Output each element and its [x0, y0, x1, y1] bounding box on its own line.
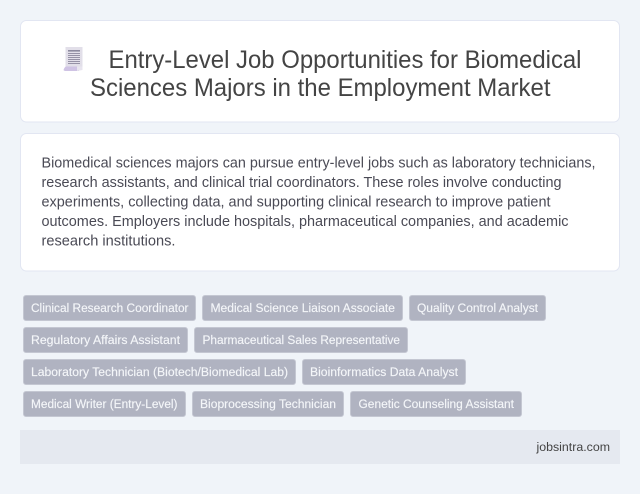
description text: research institutions. — [42, 234, 176, 250]
tag: Bioinformatics Data Analyst — [302, 360, 466, 384]
tag: Clinical Research Coordinator: Clinical Research Coordinator — [31, 301, 188, 315]
tag: Quality Control Analyst: Quality Control Analyst — [417, 301, 539, 315]
tag: Regulatory Affairs Assistant: Regulatory Affairs Assistant — [31, 333, 181, 347]
heading — [90, 46, 582, 102]
tag: Medical Science Liaison Associate: Medical Science Liaison Associate — [210, 301, 395, 315]
tag: Pharmaceutical Sales Representative — [194, 328, 408, 352]
tag: Clinical Research Coordinator — [24, 296, 196, 320]
panel: description card — [20, 134, 620, 271]
heading: Sciences Majors in the Employment Market — [90, 74, 551, 102]
tag: Laboratory Technician — [24, 360, 296, 384]
tag: Laboratory Technician: Laboratory Technician (Biotech/Biomedical Lab) — [31, 365, 288, 379]
tag: Medical Writer — [24, 392, 186, 416]
footer source text: jobsintra.com — [535, 440, 610, 454]
tag: Genetic Counseling Assistant: Genetic Counseling Assistant — [358, 397, 515, 411]
description text — [42, 156, 596, 250]
tag: Medical Science Liaison Associate — [202, 296, 402, 320]
panel: title card — [20, 20, 620, 122]
description text: Biomedical sciences majors can pursue entry-level jobs such as laboratory technicians, — [42, 156, 596, 172]
tag: Pharmaceutical Sales Representative: Pharmaceutical Sales Representative — [202, 333, 400, 347]
job tags — [24, 296, 546, 416]
description text: experiments, collecting data, and supporting clinical research to improve patient — [42, 194, 550, 210]
description text: outcomes. Employers include hospitals, pharmaceutical companies, and academic — [42, 214, 568, 230]
tag: Bioprocessing Technician — [192, 392, 344, 416]
description text: research assistants, and clinical trial coordinators. These roles involve conducting — [42, 175, 562, 191]
tag: Medical Writer: Medical Writer (Entry-Level) — [31, 397, 178, 411]
footer bar — [20, 430, 620, 464]
tag: Regulatory Affairs Assistant — [24, 328, 188, 352]
heading: Entry-Level Job Opportunities for Biomedical — [108, 46, 582, 74]
tag: Quality Control Analyst — [410, 296, 546, 320]
tag: Genetic Counseling Assistant — [350, 392, 522, 416]
tag: Bioinformatics Data Analyst: Bioinformatics Data Analyst — [310, 365, 459, 379]
icon: paper scroll — [64, 47, 82, 71]
tag: Bioprocessing Technician: Bioprocessing Technician — [200, 397, 336, 411]
